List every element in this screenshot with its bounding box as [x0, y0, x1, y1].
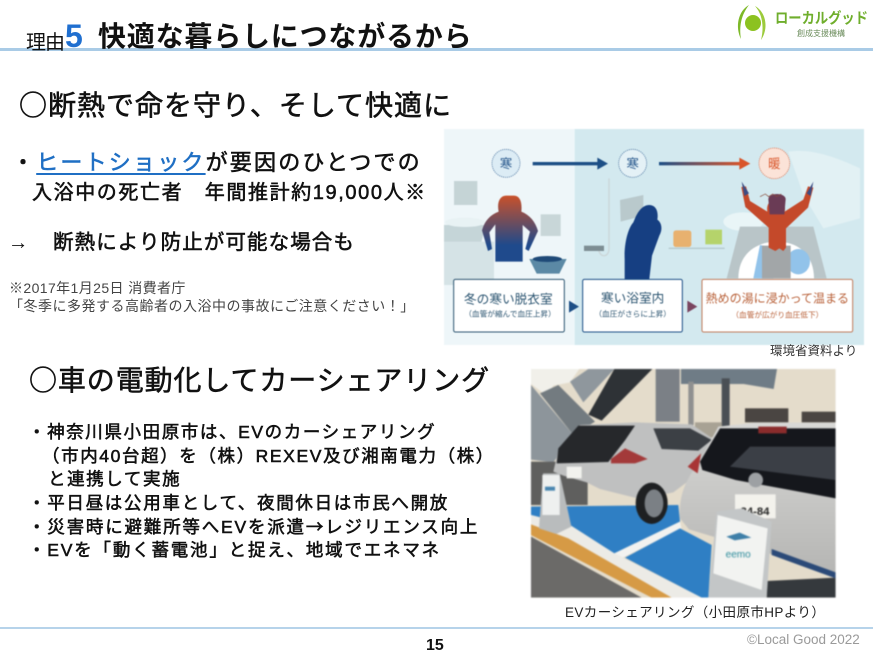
copyright: ©Local Good 2022: [747, 632, 860, 647]
illustration source: 環境省資料より: [770, 344, 857, 358]
heading: insulation: ○断熱で命を守り、そして快適に: [19, 84, 452, 124]
box 1: 冬の寒い脱衣室: [464, 291, 553, 306]
title: 快適な暮らしにつながるから: [98, 21, 472, 52]
large sign: [708, 508, 772, 598]
arrow 1: [533, 158, 608, 170]
box 2: 寒い浴室内: [601, 291, 664, 305]
insulation arrow line: →: [8, 231, 30, 254]
warm: [759, 148, 790, 179]
cold 2: 寒: [626, 157, 639, 171]
footnote: [9, 278, 415, 314]
title: 理由: [26, 32, 64, 54]
bullet 1 continued: （市内40台超）を（株）REXEV及び湘南電力（株）: [42, 446, 495, 466]
title: 5: [65, 18, 83, 54]
small sign: [539, 473, 571, 534]
room right: [584, 178, 725, 256]
figure 3: [741, 186, 813, 251]
temperature circles: [492, 148, 790, 179]
arrow 2: [659, 158, 750, 170]
footer rule: [0, 627, 873, 629]
box 2: （血圧がさらに上昇）: [594, 309, 671, 319]
box 3: 熱めの湯に浸かって温まる: [706, 291, 849, 305]
figure 1: [482, 196, 538, 262]
figure 2: [625, 205, 661, 279]
logo: [738, 5, 868, 40]
box 3: [702, 279, 853, 332]
illustration: heat shock: [444, 128, 864, 346]
heading: EV: ○車の電動化してカーシェアリング: [29, 359, 490, 399]
footnote: 「冬季に多発する高齢者の入浴中の事故にご注意ください！」: [9, 298, 415, 314]
box 1: [454, 279, 564, 332]
cold 1: [492, 149, 520, 177]
bullet 3: ・災害時に避難所等へEVを派遣→レジリエンス向上: [28, 514, 479, 539]
large sign: eemo: [726, 550, 751, 561]
heat shock line 2: 入浴中の死亡者 年間推計約19,000人※: [32, 176, 427, 205]
box 1: （血管が縮んで血圧上昇）: [464, 309, 556, 319]
right car: [680, 423, 836, 578]
bullet 1: ・神奈川県小田原市は、EVのカーシェアリング: [28, 422, 436, 442]
heat shock line 1: ・ヒートショックが要因のひとつでの: [12, 150, 422, 175]
room left: [444, 181, 567, 285]
warm: 暖: [768, 157, 781, 171]
left car: [553, 422, 713, 524]
parking bays and curb: [531, 505, 836, 598]
bullet 2: ・平日昼は公用車として、夜間休日は市民へ開放: [28, 493, 449, 513]
bullet 4: ・EVを「動く蓄電池」と捉え、地域でエネマネ: [28, 540, 441, 560]
text block: EV car sharing: [28, 422, 495, 560]
text block: heat shock: 断熱により防止が可能な場合も: [53, 231, 355, 254]
box 2: [583, 279, 682, 332]
bullet 1 end: と連携して実施: [48, 469, 181, 489]
box 3: （血管が広がり血圧低下）: [731, 309, 823, 319]
photo: EV cars: [530, 368, 837, 599]
bathtub and steam: [723, 151, 860, 278]
footnote: ※2017年1月25日 消費者庁: [9, 278, 186, 298]
logo: 創成支援機構: [797, 28, 845, 38]
insulation arrow line: [8, 231, 355, 254]
cold 1: 寒: [500, 157, 512, 171]
page number: 15: [426, 637, 444, 654]
text block: heat shock: [8, 150, 427, 254]
photo caption: EVカーシェアリング（小田原市HPより）: [565, 605, 825, 620]
cold 2: [619, 149, 647, 177]
header rule: [0, 48, 873, 51]
right car: 34-84: [741, 506, 770, 518]
